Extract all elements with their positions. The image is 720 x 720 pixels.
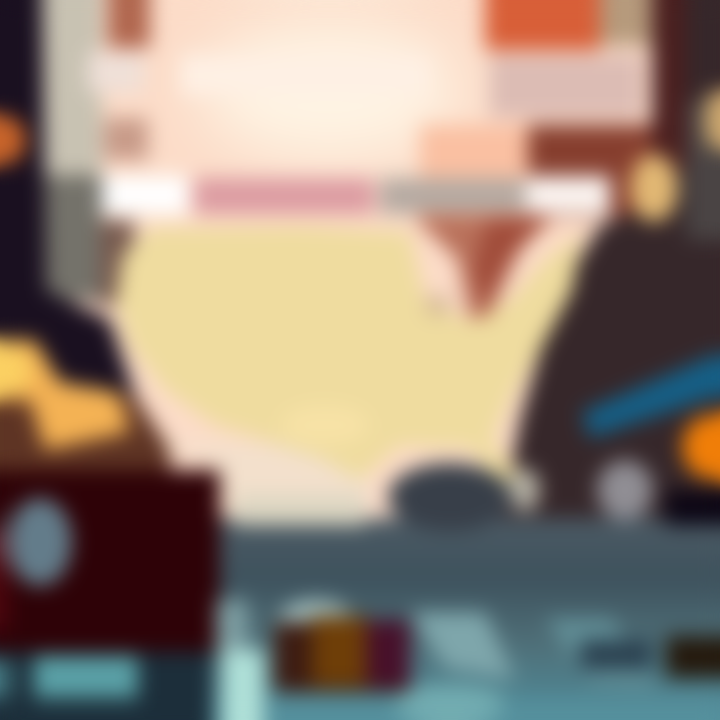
orange spot upper left <box>0 116 26 164</box>
orange glow left <box>0 340 130 450</box>
suitcase on road <box>274 600 410 692</box>
background: right dark buildings <box>500 0 720 525</box>
blue awning <box>582 352 720 438</box>
road light reflection <box>216 600 720 720</box>
map notch: red triangle over north-east <box>415 218 550 320</box>
gulf dark shapes <box>388 463 512 531</box>
brown shadow lower left <box>0 395 170 490</box>
background: left dark building <box>0 0 135 395</box>
title blurred <box>88 52 642 117</box>
emblem on red box <box>8 498 72 586</box>
teal block bottom left <box>0 656 138 698</box>
orange shop light <box>682 415 720 479</box>
dark base under red box <box>0 652 212 720</box>
background: sky <box>0 0 720 525</box>
pale ground below map <box>150 440 370 525</box>
street lamp: yellow <box>630 154 678 222</box>
subtitle bar <box>102 176 610 214</box>
USA map <box>116 226 582 500</box>
street lamp: far right <box>704 90 720 150</box>
red box lower left <box>0 470 220 652</box>
dark shadow under shop <box>665 490 720 525</box>
pale blob by shop <box>597 460 653 520</box>
background: pale column <box>42 0 134 305</box>
pale blob beside gulf <box>510 468 540 512</box>
background: road <box>0 518 720 720</box>
dark object bottom right <box>580 636 720 678</box>
background: clouds upper left <box>104 0 150 214</box>
background: red clouds upper right <box>420 0 670 226</box>
